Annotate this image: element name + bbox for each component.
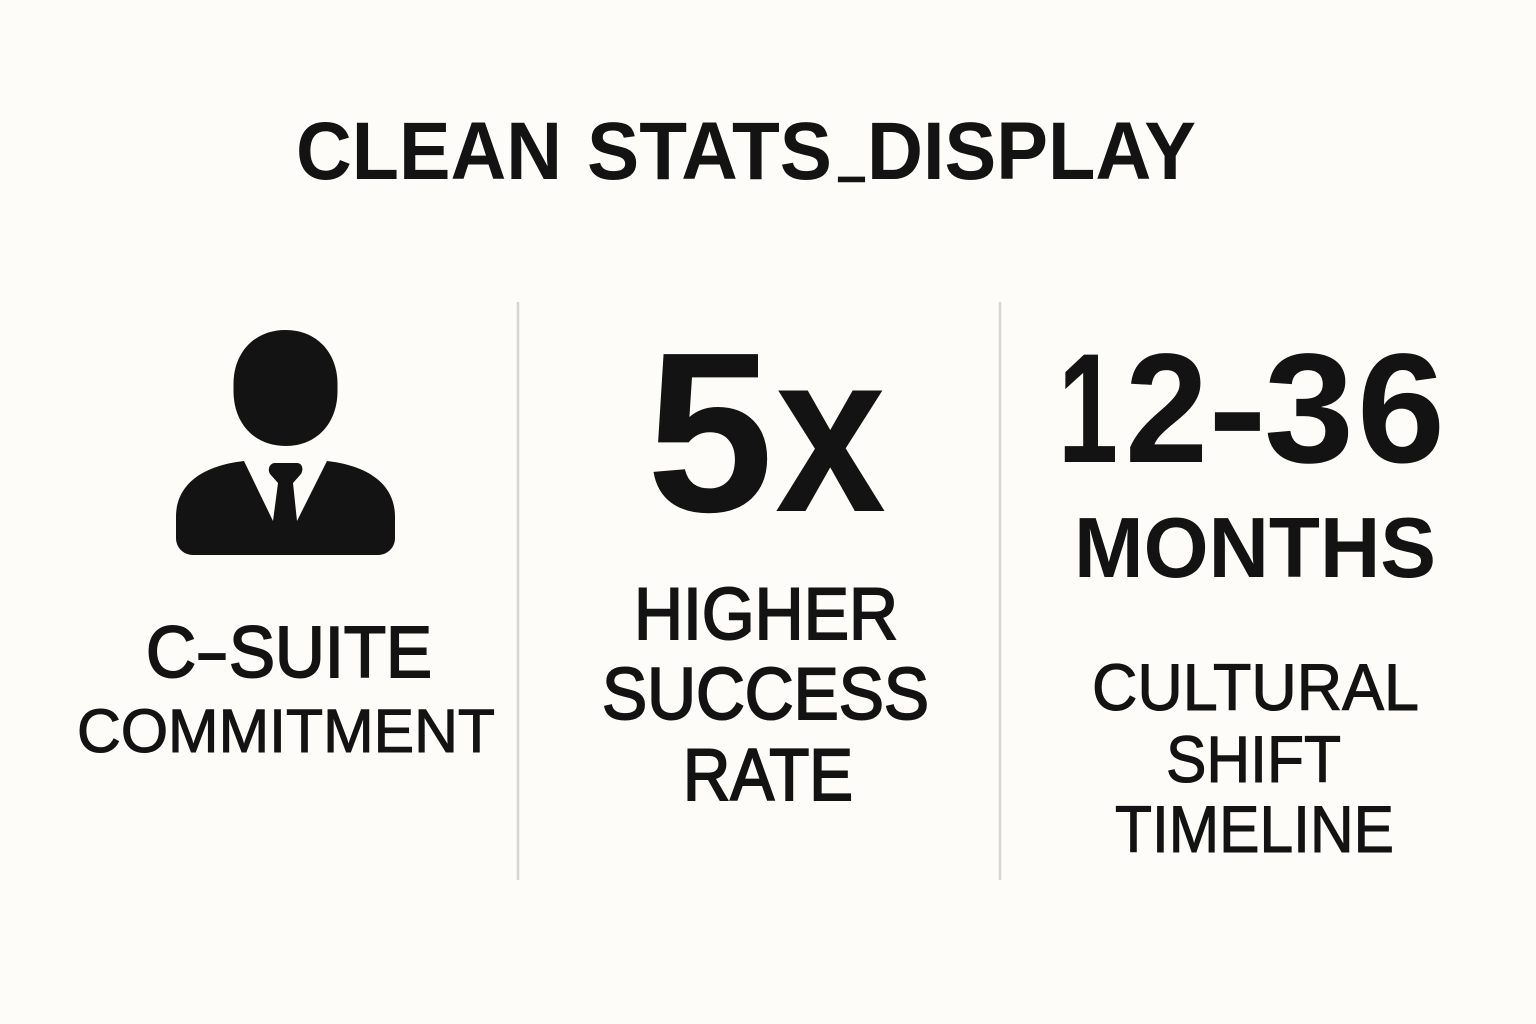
label: higher success rate: [602, 574, 929, 816]
label: c-suite commitment: COMMITMENT: [77, 697, 495, 765]
panel: c-suite commitment: [77, 330, 495, 765]
panel: higher success rate: [602, 306, 929, 816]
label: c-suite commitment: –: [199, 611, 226, 691]
label: cultural shift timeline: [1092, 650, 1419, 866]
title: CLEAN: [296, 106, 562, 197]
label: higher success rate: HIGHER: [634, 574, 898, 655]
stat: 5x: 5: [646, 306, 774, 560]
stat: 12-36: -: [1208, 322, 1267, 496]
label: cultural shift timeline: CULTURAL: [1092, 650, 1419, 724]
title: STATS: [587, 106, 832, 197]
title: _: [838, 98, 865, 189]
stat unit: months: MONTHS: [1074, 501, 1436, 596]
label: c-suite commitment: C: [146, 613, 196, 693]
panel: cultural shift timeline: [1058, 322, 1445, 866]
label: higher success rate: RATE: [683, 735, 853, 816]
label: cultural shift timeline: SHIFT: [1166, 722, 1341, 796]
stat: 12-36: 1: [1058, 322, 1118, 496]
label: cultural shift timeline: TIMELINE: [1115, 792, 1394, 866]
stat: 12-36: 3: [1264, 322, 1354, 496]
stat: 12-36: 2: [1125, 322, 1208, 496]
icon: executive in suit: [176, 330, 395, 555]
label: c-suite commitment: [77, 611, 495, 765]
stat: 12-36: 6: [1357, 322, 1445, 496]
label: higher success rate: SUCCESS: [602, 654, 929, 735]
title: DISPLAY: [867, 106, 1196, 197]
label: c-suite commitment: SUITE: [229, 613, 432, 693]
stat: 5x: x: [775, 306, 886, 560]
